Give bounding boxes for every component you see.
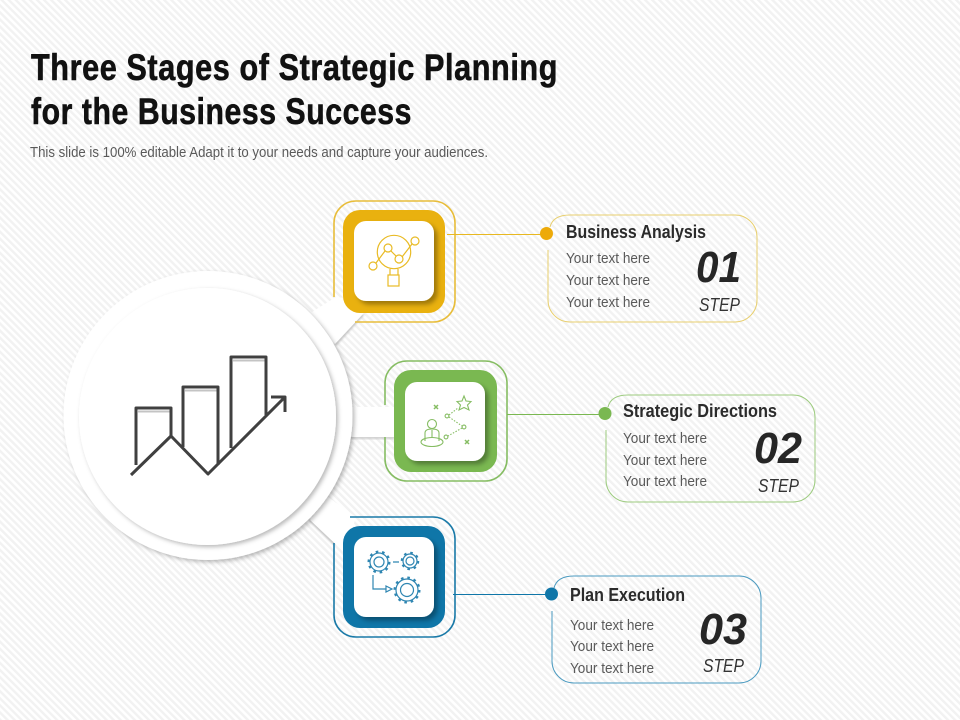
card 1: Business Analysis: Your text here: [566, 295, 650, 311]
stage 3 tile: blue: [334, 517, 455, 637]
leader line 3: [453, 594, 551, 596]
icon: person with route to star: [421, 396, 471, 446]
leader line 1: [447, 234, 546, 236]
central hub circle: [64, 271, 352, 560]
card 2: Strategic Directions: Strategic Directions: [623, 401, 777, 421]
card 1: Business Analysis: Your text here: [566, 251, 650, 267]
icon: magnifier chart bulb: [369, 235, 419, 286]
title: for the Business Success: [31, 91, 412, 132]
card 3: Plan Execution: Plan Execution: [570, 585, 685, 605]
card 1: Business Analysis: Business Analysis: [566, 222, 706, 242]
card 2: Strategic Directions: STEP: [758, 476, 799, 496]
card 2: Strategic Directions: Your text here: [623, 474, 707, 490]
card 2: Strategic Directions: [598, 395, 815, 502]
card 1: Business Analysis: [540, 215, 757, 322]
card 3: Plan Execution: STEP: [703, 656, 744, 676]
card 1: Business Analysis: Your text here: [566, 273, 650, 289]
leader line 2: [507, 414, 605, 416]
subtitle: This slide is 100% editable Adapt it to your needs and capture your audiences.: [30, 145, 488, 161]
card 3: Plan Execution: 03: [699, 605, 747, 654]
card 1: Business Analysis: 01: [696, 243, 741, 292]
icon: connected gears: [369, 552, 419, 602]
stage 1 tile: yellow: [334, 201, 455, 322]
connectors from hub to stages: [310, 297, 395, 553]
card 3: Plan Execution: Your text here: [570, 661, 654, 677]
card 1: Business Analysis: STEP: [699, 295, 740, 315]
card 3: Plan Execution: Your text here: [570, 639, 654, 655]
icon: rising bar chart with arrow: [131, 357, 285, 475]
stage 2 tile: green: [385, 361, 507, 481]
card 3: Plan Execution: [545, 576, 761, 683]
card 2: Strategic Directions: Your text here: [623, 453, 707, 469]
title: [31, 47, 558, 132]
title: Three Stages of Strategic Planning: [31, 47, 558, 88]
card 3: Plan Execution: Your text here: [570, 618, 654, 634]
card 2: Strategic Directions: Your text here: [623, 431, 707, 447]
card 2: Strategic Directions: 02: [754, 424, 803, 473]
